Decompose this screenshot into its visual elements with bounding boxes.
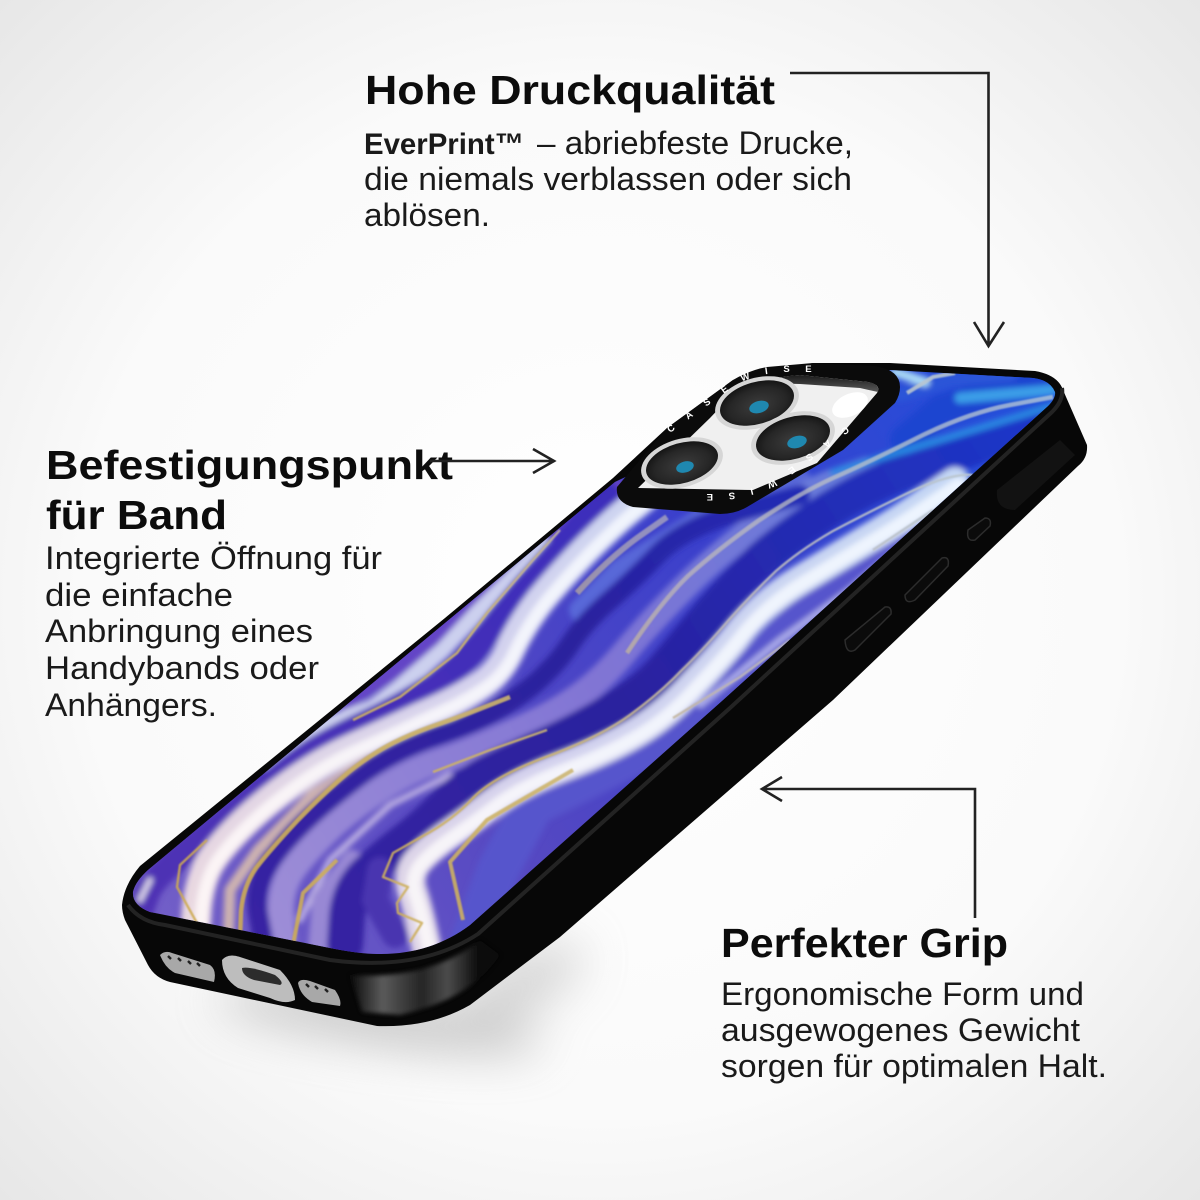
flash glare xyxy=(828,387,872,423)
description: Anhängers. xyxy=(45,687,217,723)
description: ausgewogenes Gewicht xyxy=(721,1012,1080,1048)
ring lettering: CASEWISE xyxy=(668,366,812,432)
heading: Perfekter Grip xyxy=(721,920,1008,966)
side buttons xyxy=(845,440,1075,651)
description: ablösen. xyxy=(364,197,490,233)
case rim highlight xyxy=(128,388,1062,963)
description: Ergonomische Form und xyxy=(721,976,1084,1012)
heading xyxy=(46,442,453,538)
bottom corner gloss xyxy=(350,940,500,1015)
phone shadow xyxy=(213,927,594,1067)
heading: Hohe Druckqualität xyxy=(365,67,775,113)
arrow: grip xyxy=(762,777,975,918)
arrow: strap attachment xyxy=(430,449,554,473)
description: – abriebfeste Drucke, xyxy=(537,125,853,161)
callout: Hohe Druckqualität xyxy=(364,67,853,233)
marble back print xyxy=(132,370,1056,954)
phone with marble case xyxy=(122,363,1088,1026)
callout: Perfekter Grip xyxy=(721,920,1107,1084)
lens lower left xyxy=(635,428,729,498)
camera ring xyxy=(617,363,900,514)
description: Anbringung eines xyxy=(45,613,313,649)
left speaker xyxy=(160,952,215,982)
ring lettering xyxy=(668,366,848,500)
ring lettering: CASEWISE xyxy=(707,428,848,500)
case body xyxy=(122,363,1087,1026)
camera window xyxy=(638,375,878,490)
heading: Befestigungspunkt xyxy=(46,442,453,488)
camera island xyxy=(616,363,900,514)
description: die einfache xyxy=(45,577,233,613)
gold and silver veins xyxy=(177,373,1053,945)
description: sorgen für optimalen Halt. xyxy=(721,1048,1107,1084)
description xyxy=(721,976,1107,1084)
description xyxy=(45,540,382,723)
charging port xyxy=(222,956,295,1002)
description: EverPrint™ xyxy=(364,128,524,161)
lens top xyxy=(709,367,805,439)
description: die niemals verblassen oder sich xyxy=(364,161,852,197)
lens right xyxy=(745,402,841,474)
window top shade xyxy=(760,375,878,392)
description: Handybands oder xyxy=(45,650,319,686)
description xyxy=(364,125,853,233)
arrow: print quality xyxy=(790,73,1004,346)
right speaker xyxy=(298,980,340,1006)
callout: Befestigungspunkt für Band xyxy=(45,442,453,723)
description: Integrierte Öffnung für xyxy=(45,540,382,576)
heading: für Band xyxy=(46,492,227,538)
